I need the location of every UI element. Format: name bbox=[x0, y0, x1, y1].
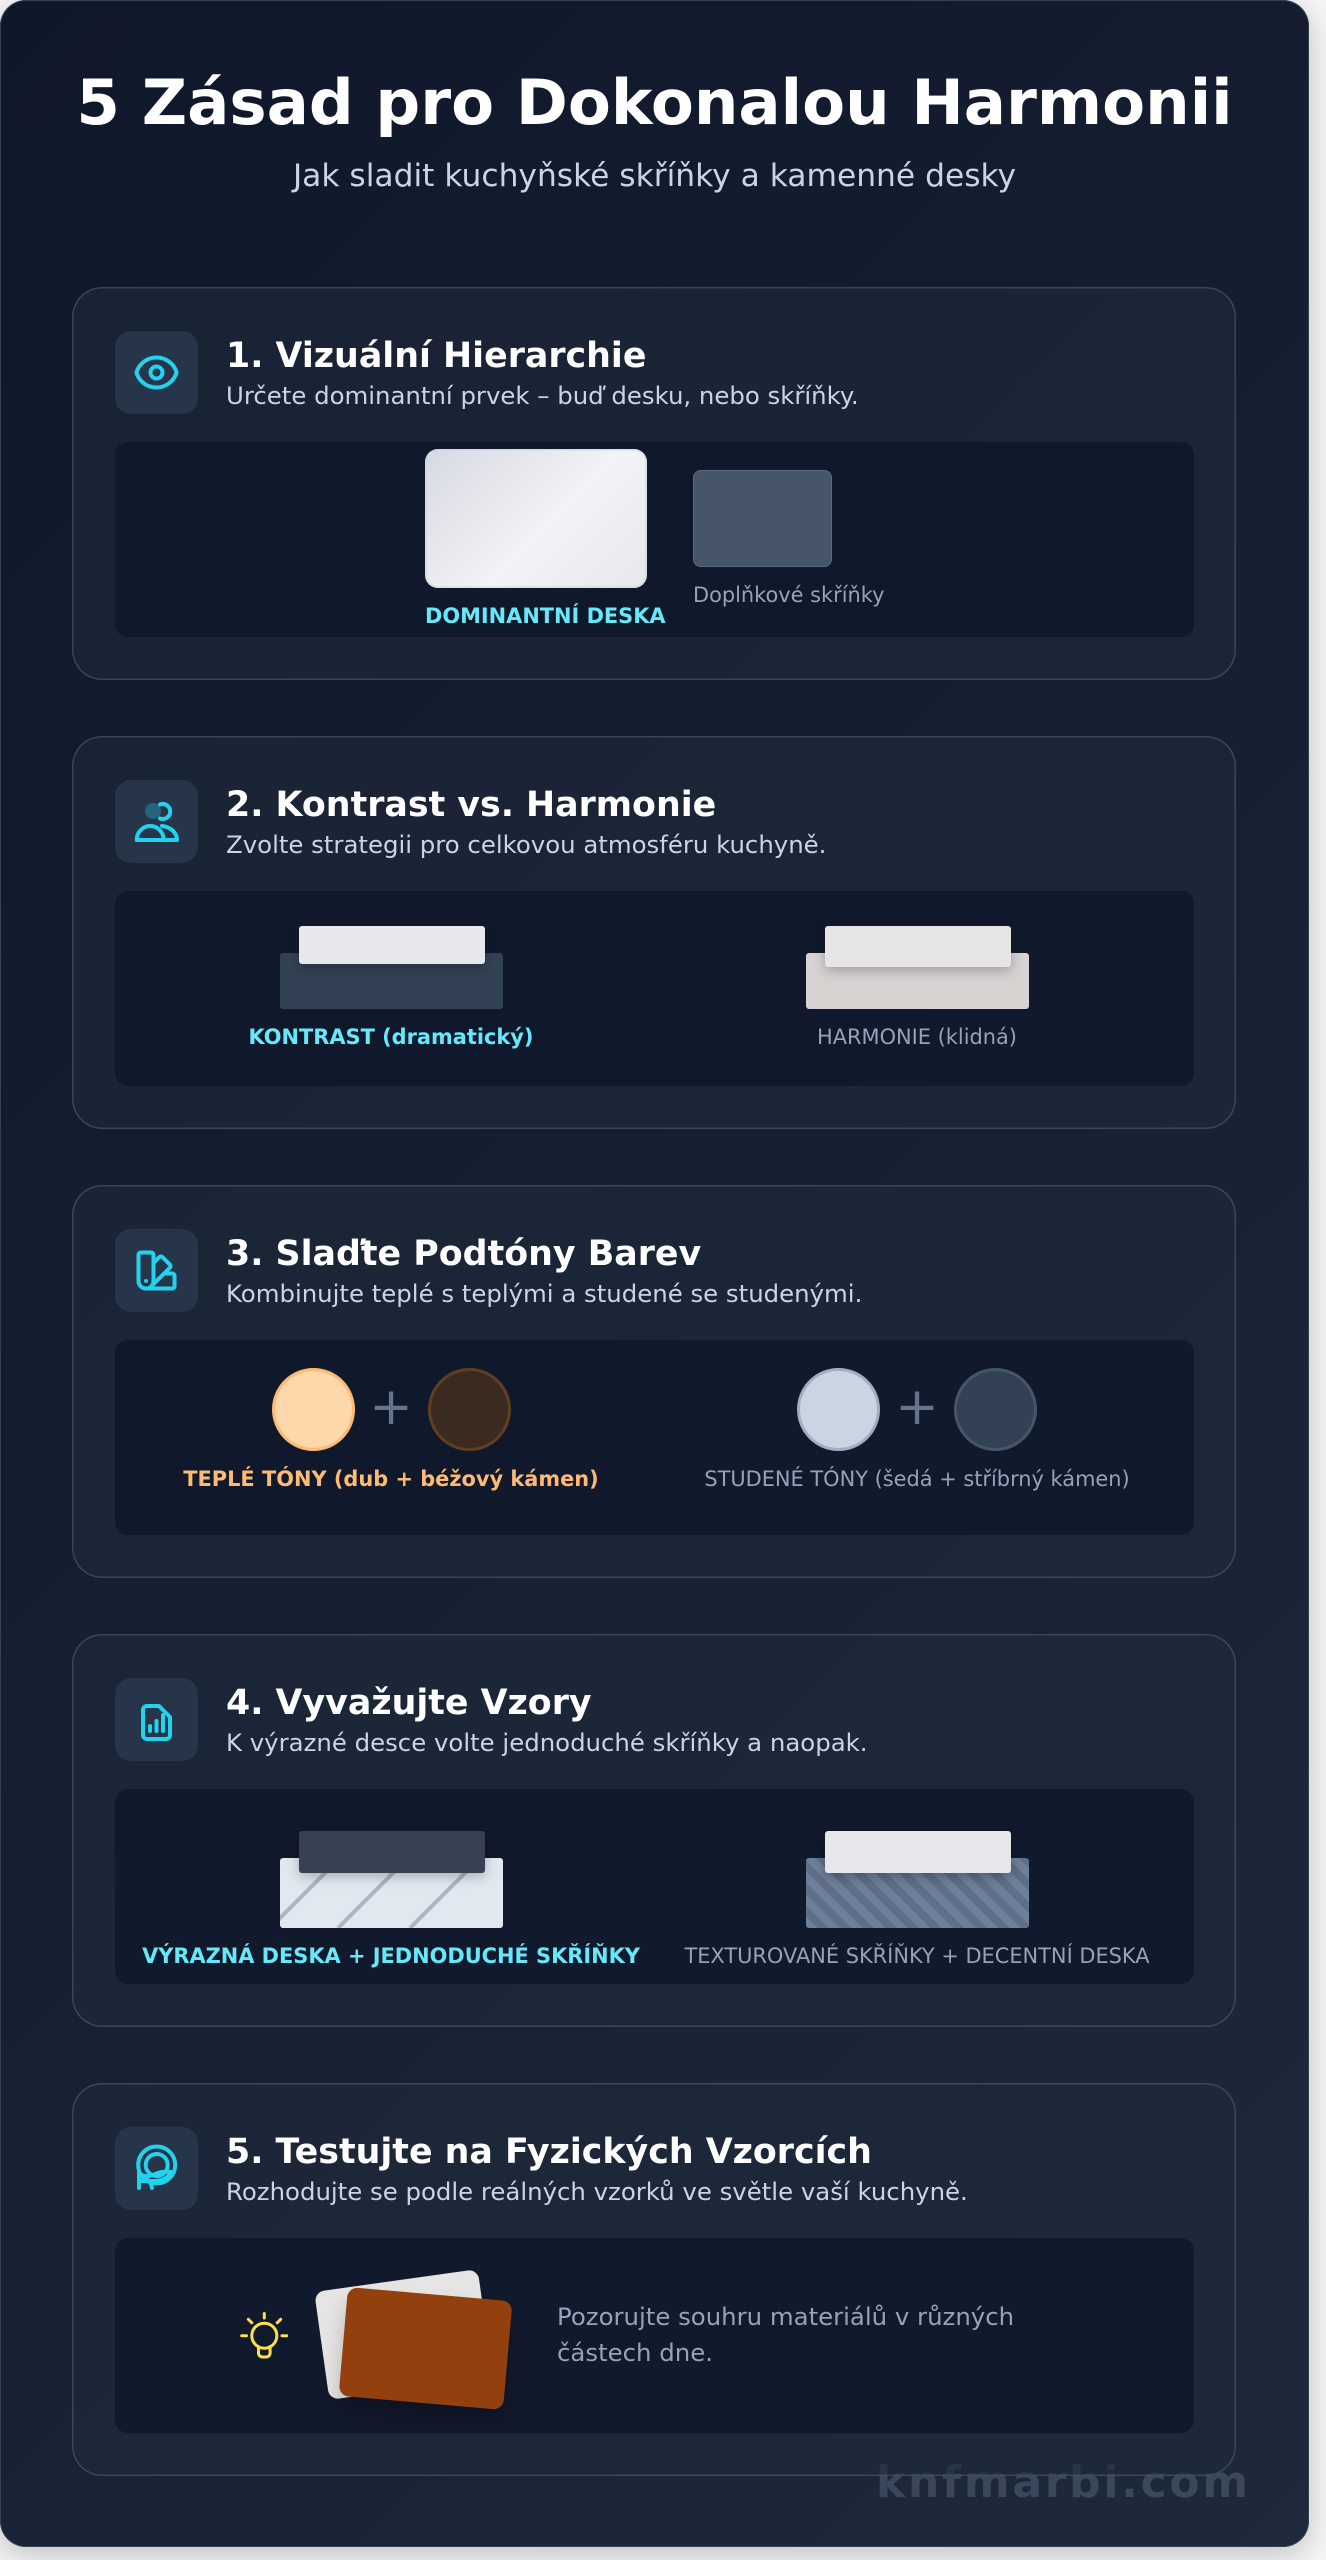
demo panel bbox=[115, 1340, 1194, 1535]
circle: warm light bbox=[272, 1368, 355, 1451]
sample: bold countertop, simple cabinets bbox=[280, 1831, 503, 1928]
icon: light bulb bbox=[240, 2312, 288, 2358]
heading: 3. Slaďte Podtóny Barev bbox=[226, 1234, 701, 1274]
circle: warm dark bbox=[428, 1368, 511, 1451]
icon: users bbox=[115, 780, 198, 863]
label: cool tones: STUDENÉ TÓNY (šedá + stříbrný kámen) bbox=[704, 1467, 1130, 1491]
label: warm tones: TEPLÉ TÓNY (dub + béžový kámen) bbox=[183, 1467, 599, 1491]
description: Zvolte strategii pro celkovou atmosféru kuchyně. bbox=[226, 830, 826, 859]
panel: 1. visual hierarchy bbox=[72, 287, 1236, 680]
panel: 5. test on samples bbox=[72, 2083, 1236, 2476]
sample: contrast bbox=[280, 926, 503, 1009]
description: Rozhodujte se podle reálných vzorků ve světle vaší kuchyně. bbox=[226, 2177, 968, 2206]
swatch: dominant countertop bbox=[425, 449, 647, 588]
label: secondary cabinets: Doplňkové skříňky bbox=[693, 583, 884, 607]
icon: swatch bbox=[115, 1229, 198, 1312]
circle: cool dark bbox=[954, 1368, 1037, 1451]
heading: 2. Kontrast vs. Harmonie bbox=[226, 785, 716, 825]
icon: document chart bbox=[115, 1678, 198, 1761]
panel: 2. contrast vs harmony bbox=[72, 736, 1236, 1129]
icon: samples bbox=[115, 2127, 198, 2210]
label: contrast: KONTRAST (dramatický) bbox=[249, 1025, 533, 1049]
note text: částech dne. bbox=[557, 2338, 713, 2367]
watermark: knfmarbi.com bbox=[876, 2457, 1251, 2508]
panel: 3. undertones bbox=[72, 1185, 1236, 1578]
note text: Pozorujte souhru materiálů v různých bbox=[557, 2302, 1014, 2331]
note text bbox=[557, 2302, 1014, 2367]
label: textured cabinets: TEXTUROVANÉ SKŘÍŇKY + DECENTNÍ DESKA bbox=[684, 1944, 1150, 1968]
sample: light stone bbox=[314, 2269, 493, 2400]
demo panel bbox=[115, 2238, 1194, 2433]
sample: wood bbox=[339, 2287, 512, 2410]
title: 5 Zásad pro Dokonalou Harmonii bbox=[76, 66, 1233, 139]
description: Určete dominantní prvek – buď desku, nebo skříňky. bbox=[226, 381, 859, 410]
panel: 4. balance patterns bbox=[72, 1634, 1236, 2027]
plus sign: + bbox=[895, 1377, 939, 1437]
sample cards bbox=[316, 2270, 512, 2412]
heading: 4. Vyvažujte Vzory bbox=[226, 1683, 592, 1723]
demo panel bbox=[115, 1789, 1194, 1984]
sample: harmony bbox=[806, 926, 1029, 1009]
demo panel bbox=[115, 891, 1194, 1086]
swatch: secondary cabinets bbox=[693, 470, 832, 567]
plus sign: + bbox=[369, 1377, 413, 1437]
subtitle: Jak sladit kuchyňské skříňky a kamenné desky bbox=[293, 158, 1016, 194]
sample: textured cabinets, subtle countertop bbox=[806, 1831, 1029, 1928]
heading: 5. Testujte na Fyzických Vzorcích bbox=[226, 2132, 872, 2172]
label: bold countertop: VÝRAZNÁ DESKA + JEDNODUCHÉ SKŘÍŇKY bbox=[142, 1944, 640, 1968]
circle: cool light bbox=[797, 1368, 880, 1451]
icon: eye bbox=[115, 331, 198, 414]
description: Kombinujte teplé s teplými a studené se studenými. bbox=[226, 1279, 862, 1308]
demo panel bbox=[115, 442, 1194, 637]
heading: 1. Vizuální Hierarchie bbox=[226, 336, 646, 376]
label: dominant countertop: DOMINANTNÍ DESKA bbox=[425, 604, 666, 628]
description: K výrazné desce volte jednoduché skříňky a naopak. bbox=[226, 1728, 868, 1757]
label: harmony: HARMONIE (klidná) bbox=[817, 1025, 1017, 1049]
